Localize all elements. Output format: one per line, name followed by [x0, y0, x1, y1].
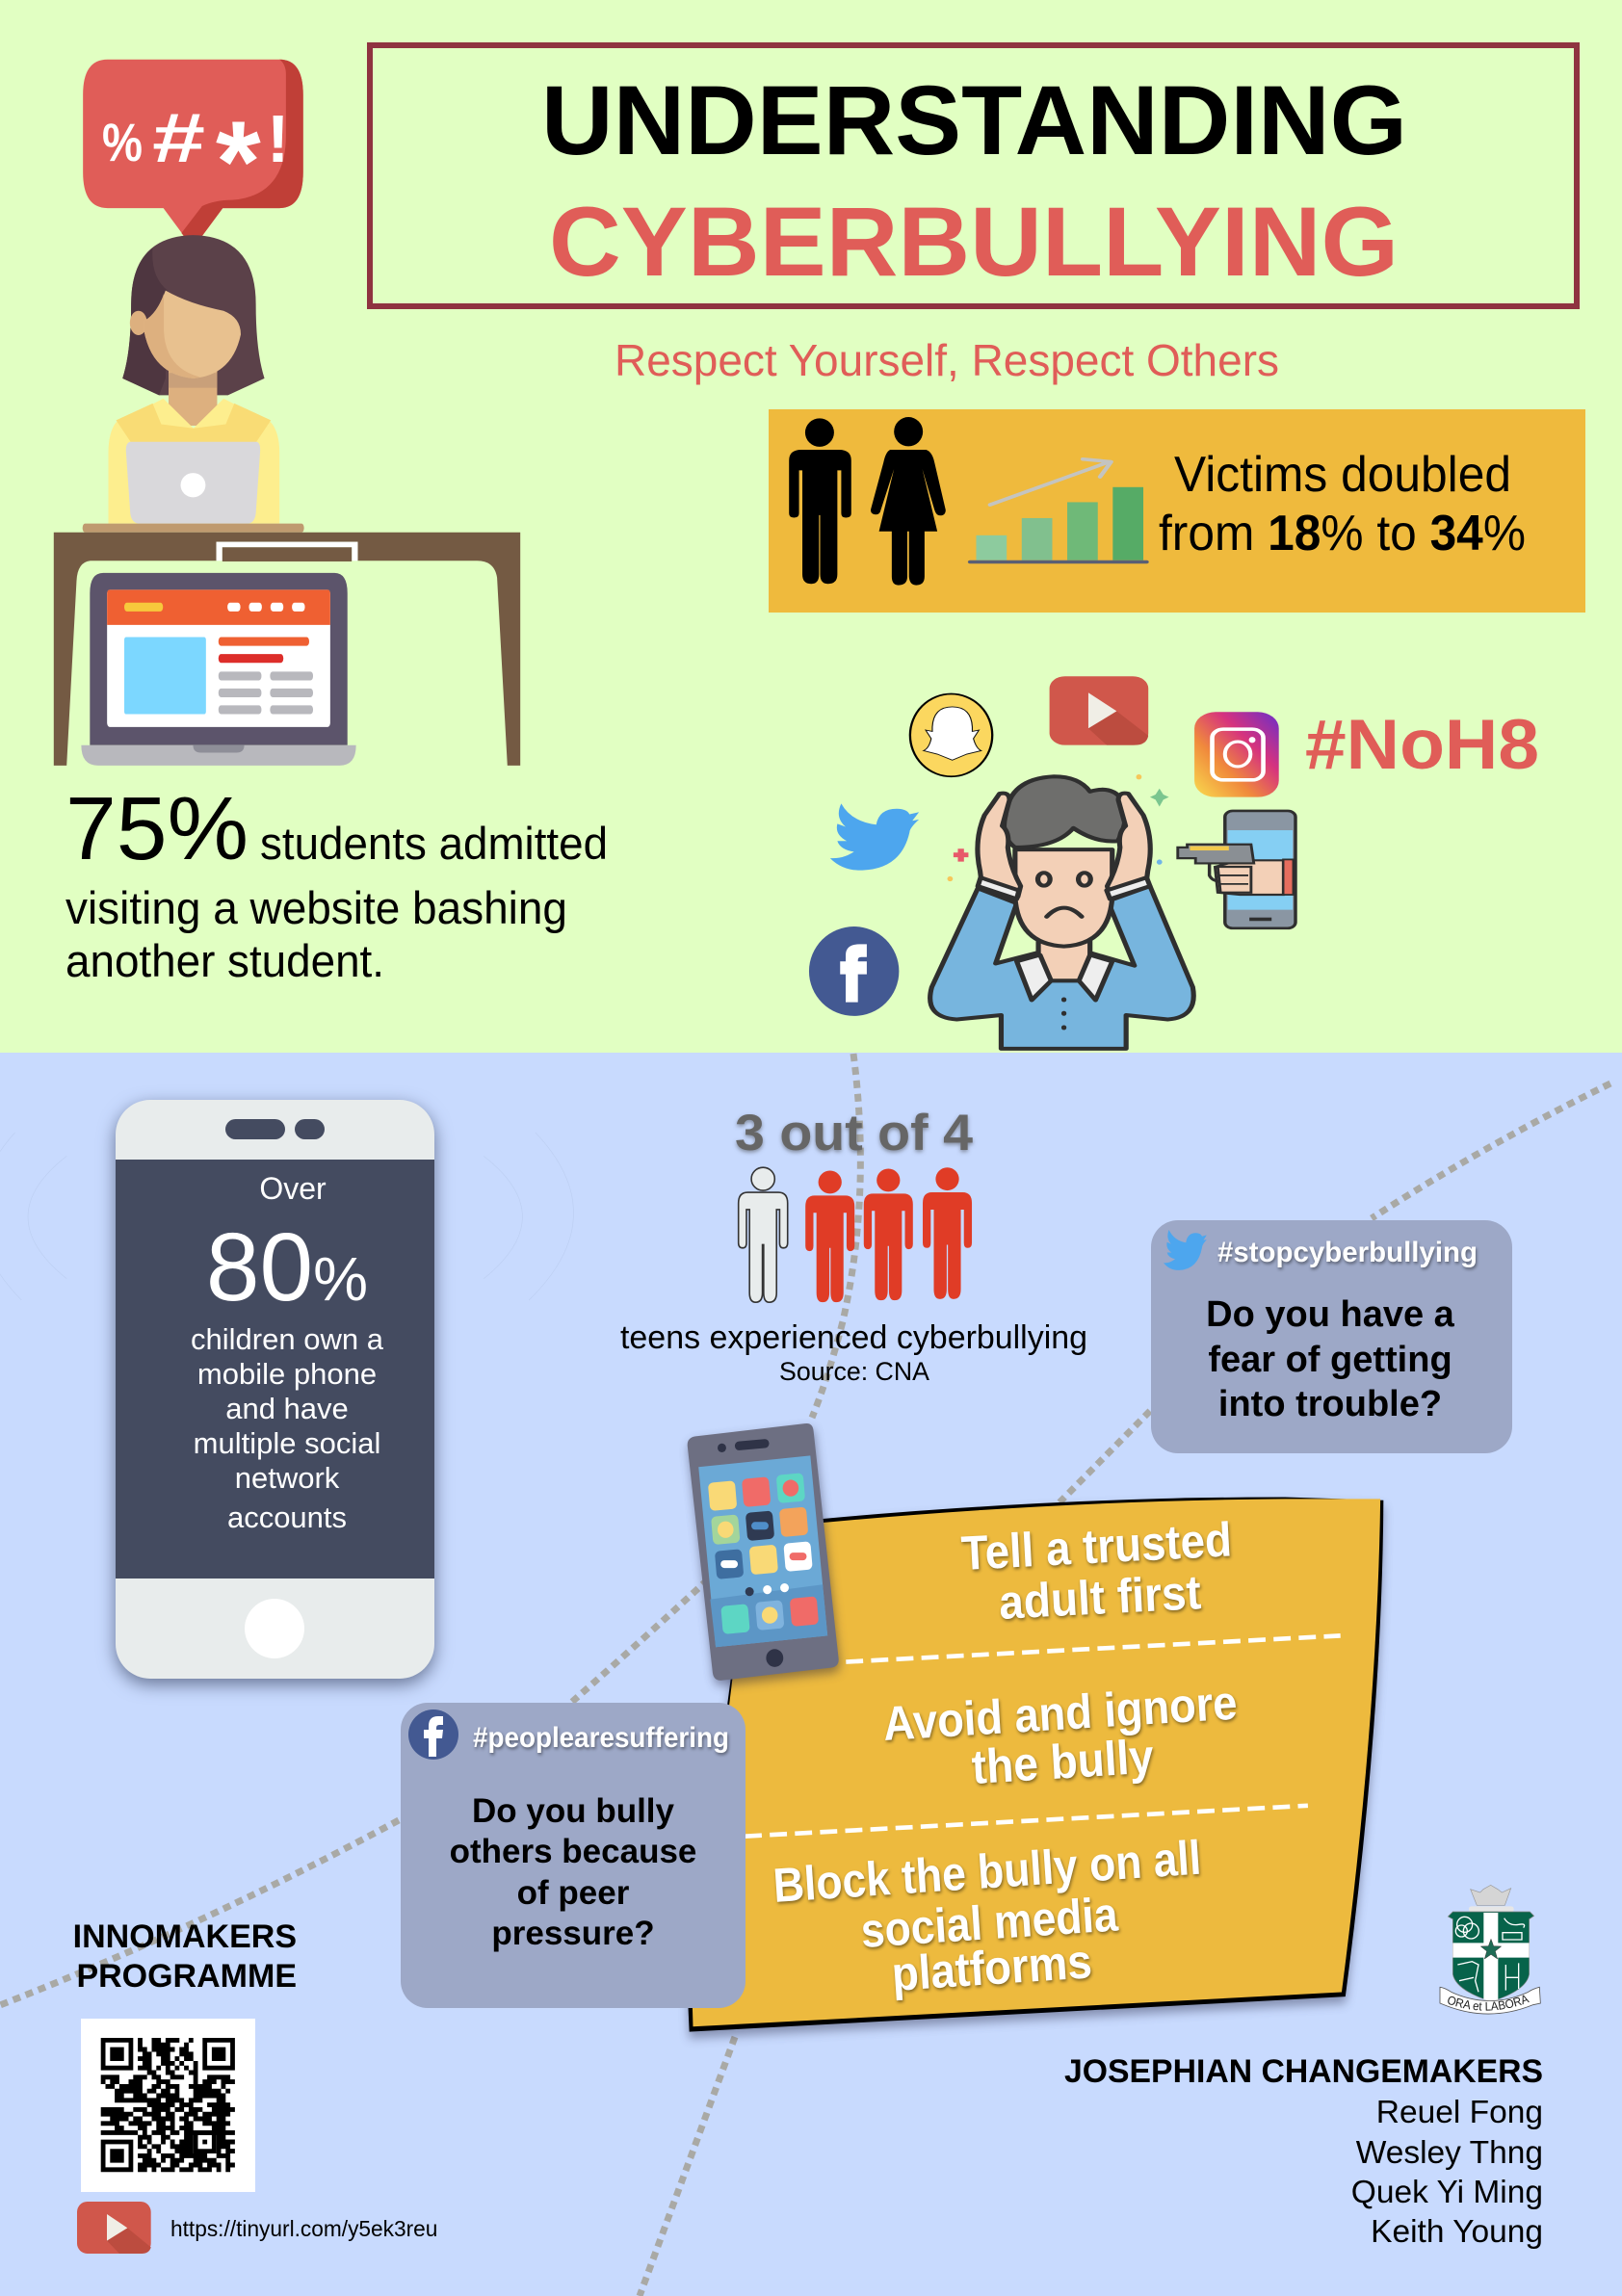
- icon: facebook: [809, 926, 899, 1016]
- question: pressure?: [491, 1915, 655, 1952]
- speech bubble symbols: #: [152, 100, 205, 177]
- icon: instagram: [1194, 712, 1279, 797]
- over: Over: [259, 1171, 327, 1206]
- question: others because: [450, 1833, 696, 1870]
- neck: [169, 361, 217, 426]
- icon: youtube: [1050, 676, 1148, 745]
- background: top panel: [0, 0, 1622, 1053]
- crown: [1469, 1885, 1514, 1912]
- stat text line 2: visiting a website bashing: [65, 882, 567, 933]
- speech bubble symbols: *: [216, 97, 261, 226]
- hashtag: #stopcyberbullying: [1217, 1237, 1478, 1268]
- hashtag: #peoplearesuffering: [473, 1722, 729, 1754]
- body text: children own a: [191, 1322, 384, 1356]
- laptop logo: [181, 473, 205, 497]
- advice 3: platforms: [890, 1934, 1093, 2001]
- desk drawer front: [222, 547, 352, 561]
- illustration: woman at desk with speech bubble: [54, 60, 520, 766]
- body text: accounts: [227, 1500, 347, 1534]
- advice 1: [960, 1512, 1233, 1630]
- credits names: [1351, 2095, 1543, 2250]
- face: [144, 291, 241, 378]
- icon: phone with gun: [1178, 811, 1295, 928]
- victims text line 1: Victims doubled: [1174, 447, 1511, 503]
- sparkles: [948, 774, 1169, 881]
- motto ribbon: [1440, 1987, 1540, 2014]
- link: https://tinyurl.com/y5ek3reu: [170, 2216, 437, 2241]
- quarter emblems: [1455, 1917, 1525, 1992]
- question: of peer: [517, 1874, 630, 1912]
- desk drawer: [217, 542, 357, 561]
- phone text block: [191, 1171, 384, 1534]
- advice 3: Block the bully on all: [772, 1831, 1203, 1913]
- illustration: social icons and stressed man: [809, 676, 1295, 1049]
- credits heading: JOSEPHIAN CHANGEMAKERS: [1064, 2053, 1543, 2090]
- victims text line 2: from 18% to 34%: [1159, 506, 1526, 561]
- person red 3: [923, 1167, 972, 1299]
- stat text line 1: students admitted: [260, 818, 608, 869]
- 80 percent: 80%: [206, 1213, 368, 1321]
- faint signal arcs beside phone: [0, 1133, 573, 1300]
- cross: [1452, 1913, 1530, 2001]
- pictogram people: [739, 1167, 972, 1302]
- credits names: Wesley Thng: [1356, 2135, 1543, 2171]
- illustration: large phone: [116, 1100, 434, 1679]
- motto: ORA et LABORA: [1448, 1996, 1530, 2011]
- credits names: Quek Yi Ming: [1351, 2175, 1543, 2210]
- credits: josephian changemakers: [1064, 2053, 1543, 2250]
- body text: and have: [225, 1392, 349, 1425]
- advice 3: social media: [859, 1887, 1120, 1958]
- question: [1206, 1294, 1455, 1424]
- QR code: [81, 2019, 255, 2192]
- advice 1: Tell a trusted: [960, 1512, 1233, 1580]
- laptop: [81, 573, 356, 766]
- phone home button: [245, 1599, 304, 1658]
- question: fear of getting: [1208, 1340, 1452, 1380]
- icon: speech bubble: [83, 60, 303, 245]
- body text: multiple social: [194, 1426, 380, 1460]
- shirt shoulders: [117, 404, 271, 446]
- card: peoplearesuffering: [401, 1703, 746, 2008]
- advice 2: the bully: [970, 1730, 1155, 1794]
- subtitle: Respect Yourself, Respect Others: [615, 335, 1279, 385]
- question: Do you have a: [1206, 1294, 1455, 1335]
- neck shadow: [169, 373, 217, 388]
- icon: twitter: [830, 803, 919, 871]
- stat text line 3: another student.: [65, 935, 384, 986]
- advice 3: [772, 1831, 1203, 2001]
- desk: [54, 533, 520, 766]
- note shape: [688, 1497, 1383, 2032]
- heading: innomakers programme: INNOMAKERS: [73, 1918, 297, 1955]
- laptop lid: [126, 442, 260, 524]
- icon: stressed man: [930, 776, 1193, 1049]
- credits names: Reuel Fong: [1376, 2095, 1543, 2130]
- title line 2: CYBERBULLYING: [549, 187, 1399, 297]
- shield: [1448, 1912, 1534, 2001]
- phone screen: [116, 1160, 434, 1578]
- title box: [370, 45, 1577, 306]
- panel: victims doubled: [769, 409, 1585, 613]
- advice 1: adult first: [998, 1565, 1203, 1630]
- advice 2: Avoid and ignore: [881, 1676, 1239, 1751]
- icon: twitter: [1164, 1230, 1207, 1270]
- stat: 75%: [65, 778, 608, 986]
- hashtag: NoH8: #NoH8: [1305, 706, 1539, 784]
- body text: mobile phone: [197, 1357, 377, 1391]
- desk top strip: [83, 524, 304, 533]
- stat caption: teens experienced cyberbullying: [620, 1319, 1087, 1356]
- dashed dividers: [745, 1635, 1341, 1837]
- woman hair: [122, 235, 265, 395]
- body text: network: [235, 1461, 340, 1495]
- question: Do you bully: [472, 1792, 675, 1830]
- dotted connector lines: [0, 1054, 1610, 2296]
- bar chart: [968, 459, 1149, 563]
- big number: 75%: [65, 778, 249, 878]
- icon: facebook: [408, 1709, 458, 1760]
- face shade: [144, 294, 200, 378]
- speech bubble symbols: !: [267, 101, 289, 176]
- icon: school crest: [1439, 1885, 1541, 2015]
- phone speaker: [225, 1119, 325, 1139]
- stat heading: 3 out of 4: [735, 1105, 974, 1161]
- icon: man and woman and chart: [789, 417, 1149, 586]
- speech bubble symbols: [102, 97, 289, 226]
- source: Source: CNA: [779, 1357, 929, 1386]
- credits names: Keith Young: [1371, 2214, 1543, 2250]
- heading: innomakers programme: PROGRAMME: [76, 1958, 297, 1995]
- question: [450, 1792, 696, 1952]
- icon: woman: [871, 417, 946, 586]
- title line 1: UNDERSTANDING: [541, 65, 1407, 175]
- card: stopcyberbullying: [1151, 1220, 1512, 1453]
- ear: [130, 311, 147, 335]
- icon: snapchat: [910, 694, 992, 776]
- phone body: [116, 1100, 434, 1679]
- stat: 3 out of 4: [620, 1105, 1087, 1386]
- heading: innomakers programme: [73, 1918, 297, 1995]
- person red 2: [864, 1169, 913, 1300]
- icon: small tilted phone: [688, 1423, 839, 1681]
- person outline: [739, 1167, 788, 1302]
- speech bubble symbols: %: [102, 112, 143, 172]
- background: bottom panel: [0, 1053, 1622, 2296]
- star: [1480, 1939, 1502, 1959]
- hair shade: [122, 248, 168, 395]
- person red 1: [805, 1171, 854, 1302]
- icon: man: [789, 418, 851, 584]
- question: into trouble?: [1218, 1384, 1442, 1424]
- icon: youtube small: [77, 2202, 151, 2254]
- panel: advice note: [688, 1497, 1383, 2032]
- shirt: [109, 399, 279, 524]
- body text: [191, 1322, 384, 1534]
- advice 2: [881, 1676, 1239, 1794]
